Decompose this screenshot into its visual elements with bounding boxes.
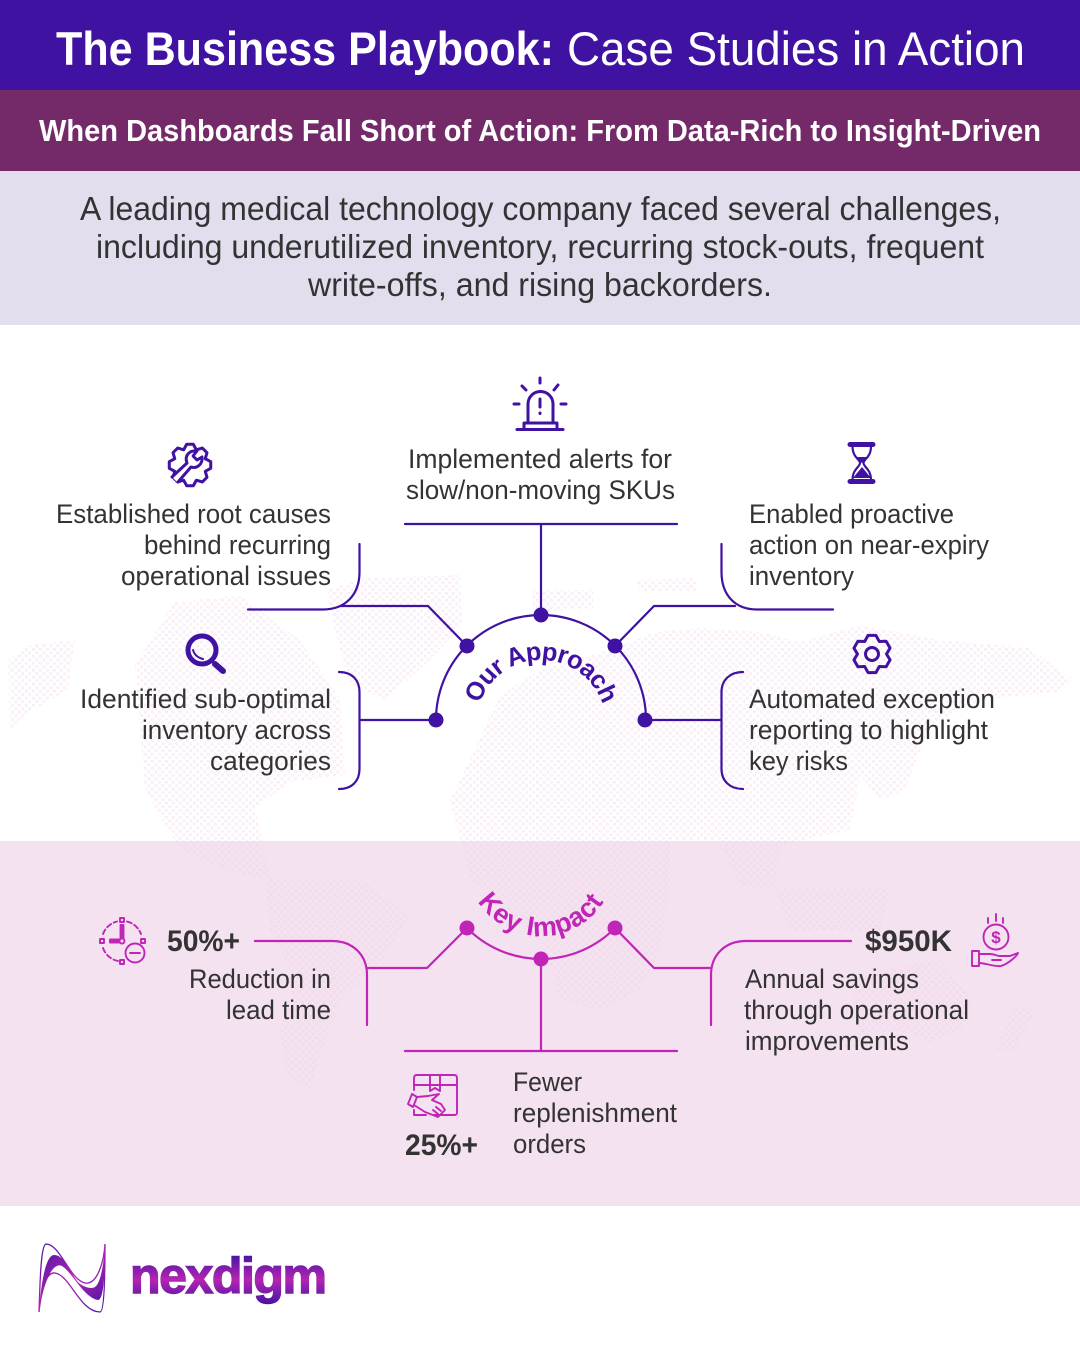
text: automated exception: reporting to highlight xyxy=(749,715,988,745)
text: reduction in lead time: Reduction in xyxy=(189,964,331,994)
heading: key impact: Key Impact xyxy=(478,891,604,940)
icon: clock with minus xyxy=(100,918,145,964)
heading: our approach: Our Approach xyxy=(466,646,616,703)
dotted world map xyxy=(0,560,1080,1101)
text: enabled proactive xyxy=(749,499,989,591)
text: enabled proactive: inventory xyxy=(749,561,854,591)
text: reduction in lead time: lead time xyxy=(226,995,331,1025)
text: automated exception: Automated exception xyxy=(749,684,995,714)
connector: right xyxy=(615,928,851,1025)
text: annual savings: Annual savings xyxy=(745,964,919,994)
connector: bottom xyxy=(405,959,677,1051)
connector: left xyxy=(255,928,467,1025)
text: implemented alerts xyxy=(406,444,675,505)
title banner: The Business Playbook: xyxy=(56,22,554,75)
text: fewer replenishment orders xyxy=(513,1067,677,1159)
text: identified sub-optimal: categories xyxy=(210,746,331,776)
text: fewer replenishment orders: Fewer xyxy=(513,1067,582,1097)
panel: our approach xyxy=(56,376,995,790)
text: enabled proactive: Enabled proactive xyxy=(749,499,954,529)
panel: key impact xyxy=(99,891,1019,1162)
subtitle banner xyxy=(0,90,1080,171)
text: annual savings: improvements xyxy=(745,1026,909,1056)
icon: gear xyxy=(854,635,890,673)
icon: magnifier xyxy=(188,636,223,671)
icon: alarm xyxy=(514,378,566,430)
text: enabled proactive: action on near-expiry xyxy=(749,530,989,560)
intro text panel: A leading medical technology company faced several challenges, xyxy=(80,190,1001,227)
title banner: Case Studies in Action xyxy=(567,22,1025,75)
text: fewer replenishment orders: replenishment xyxy=(513,1098,677,1128)
connector: lower right xyxy=(645,672,743,789)
text: implemented alerts: Implemented alerts for xyxy=(408,444,672,474)
stat: $950K: $950K xyxy=(865,925,952,958)
text: fewer replenishment orders: orders xyxy=(513,1129,586,1159)
icon: coin in hand xyxy=(972,914,1018,966)
icon: coin in hand: $ xyxy=(991,928,1001,947)
text: annual savings: through operational xyxy=(744,995,969,1025)
text: implemented alerts: slow/non-moving SKUs xyxy=(406,475,675,505)
text: established root causes xyxy=(56,499,331,591)
icon: gear with wrench xyxy=(169,444,211,486)
impact arc with nodes xyxy=(460,920,622,966)
text: annual savings xyxy=(744,964,969,1056)
text: automated exception: key risks xyxy=(749,746,848,776)
intro text panel: including underutilized inventory, recurring stock-outs, frequent xyxy=(96,228,984,265)
stat: 25%+: 25%+ xyxy=(405,1129,478,1162)
panel: key impact background xyxy=(0,841,1080,1206)
connector: top xyxy=(405,524,677,615)
text: reduction in lead time xyxy=(189,964,331,1025)
subtitle banner: When Dashboards Fall Short of Action: From Data-Rich to Insight-Driven xyxy=(39,113,1041,148)
connector: upper left xyxy=(248,544,467,646)
text: identified sub-optimal xyxy=(80,684,331,776)
text: established root causes: operational issues xyxy=(121,561,331,591)
text: automated exception xyxy=(749,684,995,776)
stat: 50%+: 50%+ xyxy=(167,925,240,958)
text: established root causes: behind recurring xyxy=(144,530,331,560)
logo: nexdigm xyxy=(39,1244,327,1312)
intro text panel xyxy=(0,171,1080,325)
text: identified sub-optimal: inventory across xyxy=(142,715,331,745)
title banner xyxy=(0,0,1080,90)
intro text panel: write-offs, and rising backorders. xyxy=(307,266,772,303)
text: identified sub-optimal: Identified sub-optimal xyxy=(80,684,331,714)
logo mark xyxy=(39,1244,105,1312)
icon: box in hand xyxy=(408,1075,457,1117)
connector: upper right xyxy=(615,544,833,646)
icon: hourglass xyxy=(850,444,873,482)
text: established root causes: Established root causes xyxy=(56,499,331,529)
connector: lower left xyxy=(339,672,436,789)
approach arc with nodes xyxy=(428,608,652,728)
logo wordmark: nexdigm xyxy=(130,1248,327,1304)
